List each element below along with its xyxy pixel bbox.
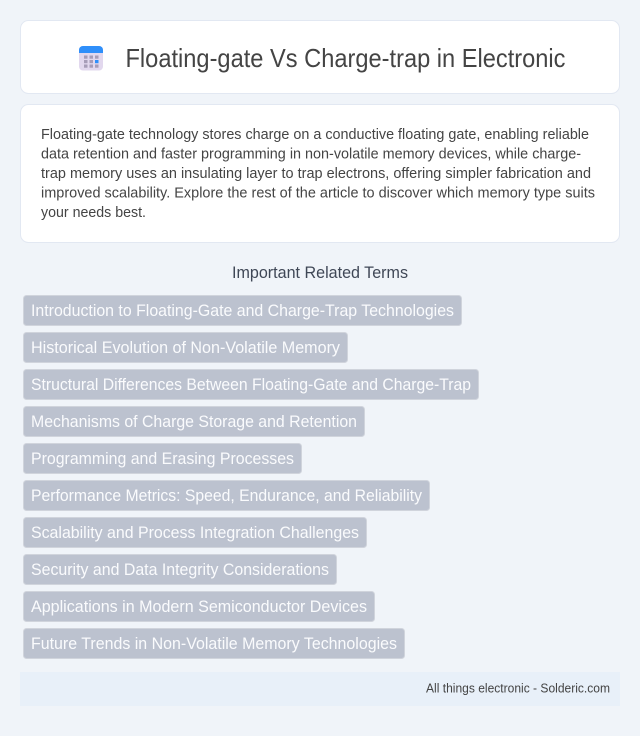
term 6: [24, 480, 430, 510]
term 7: [24, 518, 366, 548]
term 8: [24, 554, 336, 584]
term 7: Scalability and Process Integration Challenges: [31, 523, 359, 542]
term 5: Programming and Erasing Processes: [31, 449, 294, 468]
text block: summary paragraph: Floating-gate technology stores charge on a conductive floating gate, enabling reliable: [41, 127, 589, 143]
term 9: Applications in Modern Semiconductor Devices: [31, 597, 367, 616]
term 4: [24, 406, 364, 436]
term 8: Security and Data Integrity Considerations: [31, 560, 329, 579]
icon: calendar: [79, 46, 103, 70]
footer: All things electronic - Solderic.com: [426, 682, 610, 696]
text block: summary paragraph: your needs best.: [41, 205, 146, 221]
footer: [20, 672, 620, 706]
text block: summary paragraph: data retention and faster programming in non-volatile memory devices, while charge-: [41, 147, 581, 163]
term 6: Performance Metrics: Speed, Endurance, and Reliability: [31, 486, 423, 505]
term 3: Structural Differences Between Floating-Gate and Charge-Trap: [31, 375, 471, 394]
term 10: [24, 628, 404, 658]
term 2: Historical Evolution of Non-Volatile Memory: [31, 338, 341, 357]
list: related terms: [24, 296, 478, 658]
term 1: Introduction to Floating-Gate and Charge-Trap Technologies: [31, 301, 454, 320]
term 1: [24, 296, 462, 326]
text block: summary paragraph: improved scalability. Explore the rest of the article to discover which memory type suits: [41, 186, 595, 202]
panel: summary: [20, 104, 620, 242]
term 2: [24, 332, 348, 362]
term 10: Future Trends in Non-Volatile Memory Technologies: [31, 634, 397, 653]
term 9: [24, 592, 374, 622]
term 3: [24, 370, 478, 400]
heading: related terms: Important Related Terms: [232, 263, 408, 282]
term 5: [24, 444, 302, 474]
term 4: Mechanisms of Charge Storage and Retention: [31, 412, 357, 431]
title: Floating-gate Vs Charge-trap in Electronic: [126, 43, 566, 73]
text block: summary paragraph: trap memory uses an insulating layer to trap electrons, offering simpler fabrication and: [41, 166, 591, 182]
panel: title card: [20, 20, 620, 94]
text block: summary paragraph: [41, 127, 595, 221]
